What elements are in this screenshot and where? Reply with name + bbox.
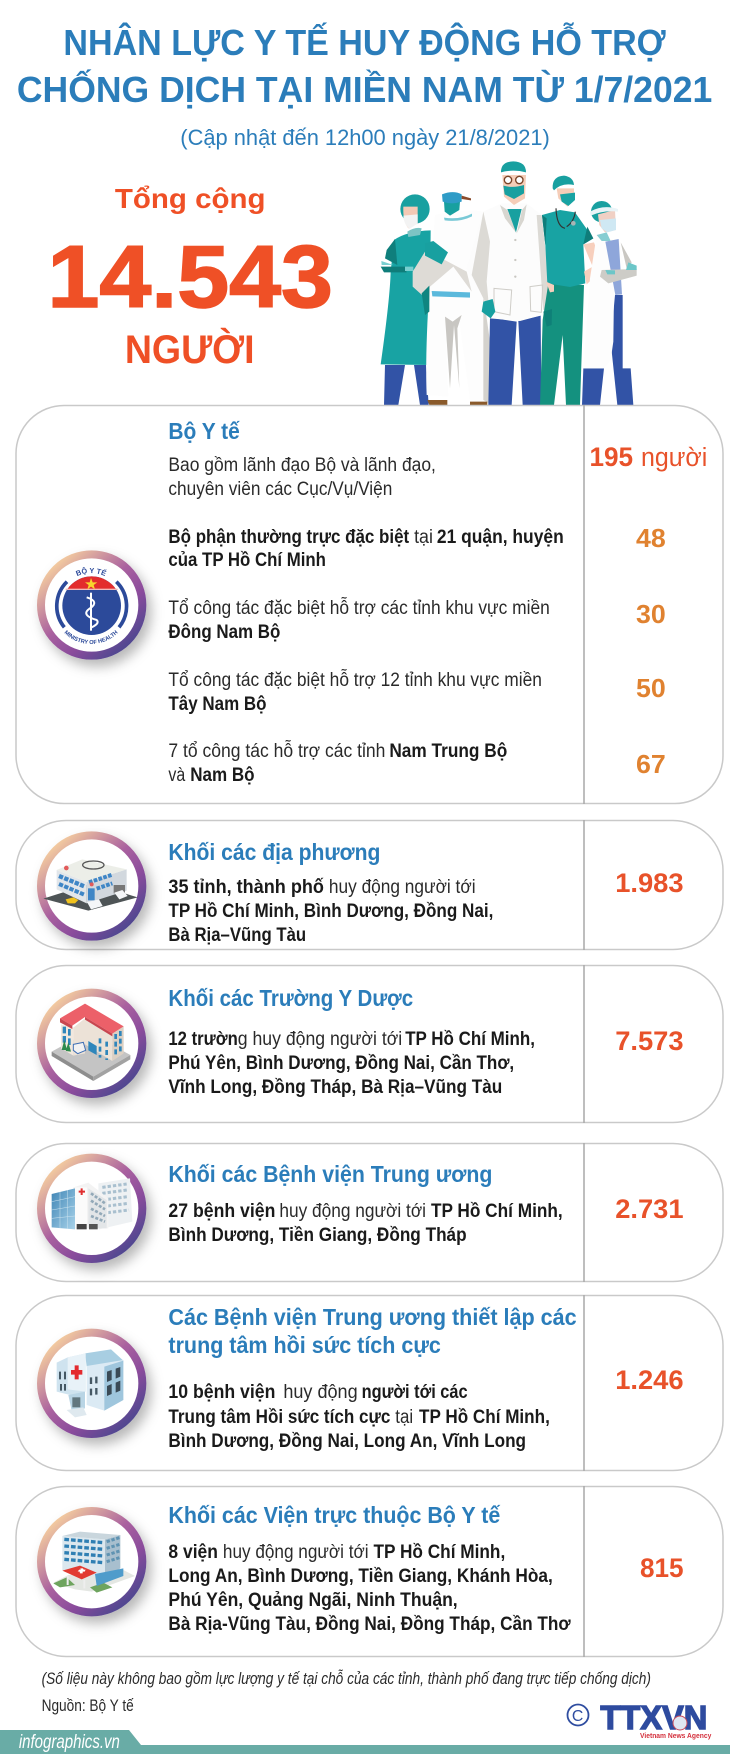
icon: Ministry of Health emblem xyxy=(36,550,158,674)
icon: Ministry of Health emblem: MINISTRY OF HEALTH xyxy=(64,630,118,644)
number: 7.573: 7.573 xyxy=(615,1026,684,1056)
text: institutes: Long An, Bình Dương, Tiền Giang, Khánh Hòa, xyxy=(168,1566,553,1587)
text: leadership: chuyên viên các Cục/Vụ/Viện xyxy=(168,479,392,500)
panel: Khối các Bệnh viện Trung ương xyxy=(16,1143,723,1282)
text: central hospitals: 27 bệnh viện xyxy=(168,1201,275,1222)
text: institutes: Phú Yên, Quảng Ngãi, Ninh Thuận, xyxy=(168,1590,458,1611)
total figure: Tổng cộng xyxy=(115,183,266,214)
text: institutes: 8 viện xyxy=(168,1542,218,1563)
text: ICU centres: Trung tâm Hồi sức tích cực xyxy=(168,1407,390,1428)
text: institutes: huy động người tới xyxy=(223,1542,369,1563)
title xyxy=(17,23,712,110)
number: 1.246: 1.246 xyxy=(615,1365,684,1395)
row: Nam Trung Bộ team: và xyxy=(168,765,186,786)
text: ICU centres: Bình Dương, Đồng Nai, Long An, Vĩnh Long xyxy=(168,1431,526,1452)
row: special standing unit: của TP Hồ Chí Minh xyxy=(168,550,326,571)
logo: TTXVN: C xyxy=(572,1708,583,1725)
row: Tây Nam Bộ team: Tây Nam Bộ xyxy=(168,694,266,715)
panel: Khối các Trường Y Dược xyxy=(16,965,723,1123)
text: institutes: Bà Rịa-Vũng Tàu, Đồng Nai, Đồng Tháp, Cần Thơ xyxy=(168,1614,571,1635)
panel: Bộ Y tế xyxy=(15,404,724,804)
icon: medical school building xyxy=(41,993,142,1094)
number: 195 người: 195 xyxy=(589,442,633,472)
row: Nam Trung Bộ team xyxy=(168,740,666,786)
person: face shield xyxy=(582,201,637,405)
text: central hospitals: Bình Dương, Tiền Giang, Đồng Tháp xyxy=(168,1225,467,1246)
footer bar: infographics.vn xyxy=(0,1730,730,1754)
icon: hospital with red cross xyxy=(41,1333,142,1434)
number: 1.983: 1.983 xyxy=(615,868,684,898)
text: leadership xyxy=(168,455,436,500)
row: Đông Nam Bộ team: Tổ công tác đặc biệt hỗ trợ các tỉnh khu vực miền xyxy=(168,597,550,619)
icon: city hospital on street xyxy=(41,835,142,937)
text: schools: Vĩnh Long, Đồng Tháp, Bà Rịa–Vũng Tàu xyxy=(168,1077,502,1098)
number: 2.731: 2.731 xyxy=(615,1194,684,1224)
text: schools: Phú Yên, Bình Dương, Đồng Nai, Cần Thơ, xyxy=(168,1053,514,1074)
total figure xyxy=(48,183,333,372)
illustration: medical staff group xyxy=(381,161,637,405)
text: provinces: 35 tỉnh, thành phố xyxy=(168,877,324,898)
logo: TTXVN: Vietnam News Agency xyxy=(640,1731,712,1740)
text: ICU centres xyxy=(168,1382,550,1452)
person: doctor in white coat xyxy=(467,161,552,405)
text: provinces: Bà Rịa–Vũng Tàu xyxy=(168,925,306,946)
text: central hospitals: huy động người tới xyxy=(279,1201,426,1222)
person: protective suit xyxy=(413,192,490,405)
row: Đông Nam Bộ team xyxy=(168,597,666,643)
row: special standing unit xyxy=(168,525,666,571)
panel: Khối các Viện trực thuộc Bộ Y tế xyxy=(16,1486,723,1657)
text: central hospitals: TP Hồ Chí Minh, xyxy=(431,1201,563,1222)
text: ICU centres: người tới các xyxy=(362,1382,468,1403)
heading: Khối các Trường Y Dược: Khối các Trường Y Dược xyxy=(168,985,413,1011)
number: 815: 815 xyxy=(640,1553,684,1583)
row: special standing unit: Bộ phận thường trực đặc biệt xyxy=(168,527,410,548)
heading: Các Bệnh viện Trung ương thiết lập các trung tâm hồi sức tích cực xyxy=(168,1304,577,1358)
title: CHỐNG DỊCH TẠI MIỀN NAM TỪ 1/7/2021 xyxy=(17,70,712,110)
text: schools xyxy=(168,1029,535,1098)
row: Nam Trung Bộ team: Nam Bộ xyxy=(190,765,255,786)
panel: Khối các địa phương xyxy=(16,820,723,950)
text: provinces: huy động người tới xyxy=(329,877,476,898)
text: ICU centres: TP Hồ Chí Minh, xyxy=(419,1407,550,1428)
heading: Các Bệnh viện Trung ương thiết lập các trung tâm hồi sức tích cực: trung tâm hồi sức tích cực xyxy=(168,1332,441,1358)
total figure: NGƯỜI xyxy=(125,326,255,372)
person: teal gown xyxy=(381,194,431,405)
heading: Bộ Y tế: Bộ Y tế xyxy=(168,418,240,444)
text: ICU centres: 10 bệnh viện xyxy=(168,1382,275,1403)
panel: Trung tâm hồi sức tích cực xyxy=(16,1295,723,1471)
text: ICU centres: huy động xyxy=(283,1382,358,1403)
row: special standing unit: tại xyxy=(414,527,433,548)
heading: Khối các Viện trực thuộc Bộ Y tế: Khối các Viện trực thuộc Bộ Y tế xyxy=(168,1502,501,1528)
row: Nam Trung Bộ team: Nam Trung Bộ xyxy=(389,741,507,762)
text: central hospitals xyxy=(168,1201,563,1246)
row: Nam Trung Bộ team: 67 xyxy=(636,751,666,779)
text: institutes: TP Hồ Chí Minh, xyxy=(373,1542,505,1563)
icon: institute building xyxy=(41,1511,142,1612)
row: Đông Nam Bộ team: Đông Nam Bộ xyxy=(168,622,280,643)
heading: Khối các địa phương: Khối các địa phương xyxy=(168,839,380,865)
text: leadership: Bao gồm lãnh đạo Bộ và lãnh đạo, xyxy=(168,455,436,476)
text: provinces: TP Hồ Chí Minh, Bình Dương, Đồng Nai, xyxy=(168,901,493,922)
text: ICU centres: tại xyxy=(395,1407,413,1428)
row: Tây Nam Bộ team xyxy=(168,669,666,715)
number: 195 người: người xyxy=(641,444,707,472)
text: institutes xyxy=(168,1542,571,1635)
row: Tây Nam Bộ team: 50 xyxy=(636,675,666,703)
heading: Các Bệnh viện Trung ương thiết lập các trung tâm hồi sức tích cực: Các Bệnh viện Trung ương thiết lập các xyxy=(168,1304,577,1330)
number: 195 người xyxy=(589,442,707,472)
row: Đông Nam Bộ team: 30 xyxy=(636,601,666,629)
total figure: 14.543 xyxy=(48,228,333,326)
text: schools: TP Hồ Chí Minh, xyxy=(405,1029,535,1050)
row: Nam Trung Bộ team: 7 tổ công tác hỗ trợ các tỉnh xyxy=(168,740,385,762)
row: Tây Nam Bộ team: Tổ công tác đặc biệt hỗ trợ 12 tỉnh khu vực miền xyxy=(168,669,542,691)
row: special standing unit: 21 quận, huyện xyxy=(437,527,564,548)
title: NHÂN LỰC Y TẾ HUY ĐỘNG HỖ TRỢ xyxy=(63,23,666,63)
footer bar: infographics.vn: infographics.vn xyxy=(19,1732,120,1753)
icon: Ministry of Health emblem: BỘ Y TẾ xyxy=(76,567,107,576)
source: Nguồn: Bộ Y tế xyxy=(42,1696,134,1715)
subtitle: update time: (Cập nhật đến 12h00 ngày 21/8/2021) xyxy=(180,125,550,150)
text: schools: g huy động người tới xyxy=(238,1029,402,1050)
icon: central hospital tower xyxy=(41,1158,142,1259)
logo: TTXVN: TTXVN xyxy=(600,1699,707,1736)
person: nurse in teal scrubs xyxy=(540,176,603,405)
row: special standing unit: 48 xyxy=(636,525,666,553)
text: schools: 12 trườn xyxy=(168,1029,238,1050)
logo: TTXVN xyxy=(568,1699,712,1740)
heading: Khối các Bệnh viện Trung ương: Khối các Bệnh viện Trung ương xyxy=(168,1161,492,1187)
text: provinces xyxy=(168,877,493,946)
